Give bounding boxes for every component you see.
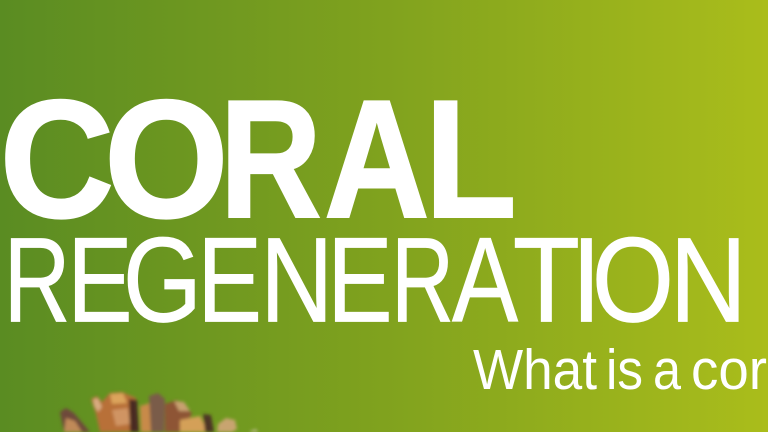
- title: coral: O: [104, 64, 229, 253]
- title: regeneration: R: [4, 212, 70, 347]
- subtitle: is: [606, 338, 643, 402]
- subtitle: a: [653, 338, 681, 402]
- coral photo: [60, 392, 258, 432]
- title: regeneration: E: [327, 213, 393, 348]
- subtitle: [473, 338, 767, 402]
- title: regeneration: R: [391, 214, 454, 348]
- title: regeneration: A: [452, 213, 518, 348]
- title: coral: R: [220, 65, 322, 253]
- title: regeneration: O: [592, 213, 674, 348]
- title: coral: L: [425, 65, 517, 253]
- subtitle: What: [473, 338, 597, 402]
- title: regeneration: [4, 212, 747, 348]
- title: regeneration: N: [670, 214, 747, 348]
- title: coral: [0, 64, 517, 253]
- title: regeneration: N: [260, 212, 333, 348]
- subtitle: cor: [691, 338, 767, 402]
- title: coral: A: [324, 65, 430, 253]
- title: regeneration: G: [123, 212, 202, 348]
- title: coral: C: [0, 65, 114, 253]
- title: regeneration: T: [513, 212, 580, 348]
- title: regeneration: E: [197, 213, 262, 348]
- title: regeneration: I: [571, 213, 601, 348]
- title: regeneration: E: [67, 213, 133, 348]
